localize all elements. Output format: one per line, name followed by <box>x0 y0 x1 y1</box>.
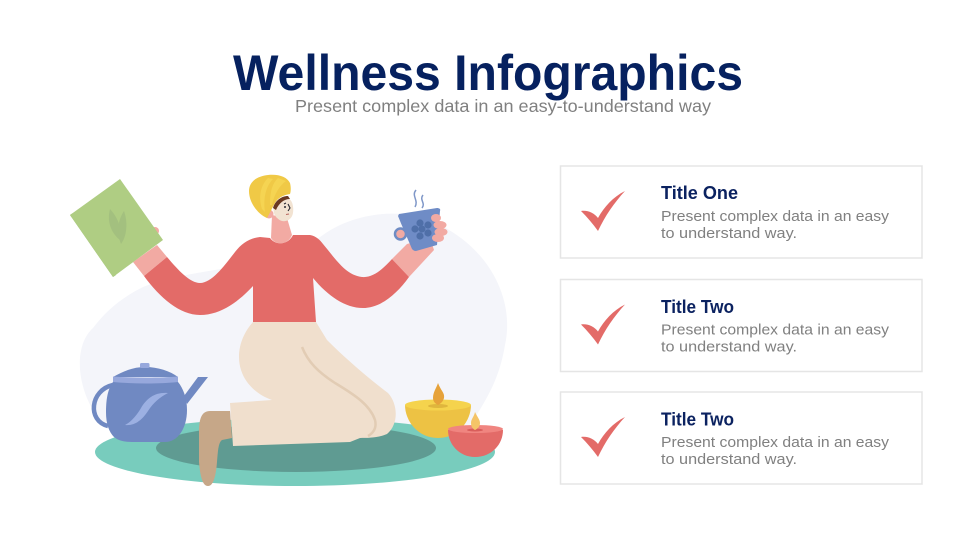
text: description: to understand way. <box>661 451 797 468</box>
illustration: wellness scene <box>70 175 507 486</box>
text: description: Present complex data in an easy <box>661 434 890 451</box>
text: description: to understand way. <box>661 338 797 356</box>
red candle <box>448 412 503 457</box>
turban <box>249 175 291 218</box>
icon: check mark <box>581 417 625 457</box>
icon: teapot <box>94 363 208 442</box>
heading: Title Two: Title Two <box>661 410 734 430</box>
text: description: to understand way. <box>661 225 797 242</box>
right hand <box>392 229 434 277</box>
neck <box>271 215 292 243</box>
panel: card one <box>560 166 922 258</box>
icon: check mark <box>581 191 625 231</box>
icon: book <box>70 179 163 277</box>
mat <box>95 418 495 486</box>
left hand <box>133 227 167 276</box>
head <box>249 175 293 221</box>
subtitle: Present complex data in an easy-to-understand way <box>295 96 711 116</box>
heading: Title Two: Title Two <box>661 297 734 317</box>
text: description: Present complex data in an easy <box>661 208 890 225</box>
foot <box>199 411 232 486</box>
title: Wellness Infographics <box>233 45 743 101</box>
icon: mug <box>395 190 448 251</box>
fingers <box>431 214 448 242</box>
mat shadow <box>156 424 436 472</box>
text: description: Present complex data in an easy <box>661 322 890 338</box>
sweater <box>144 235 409 322</box>
yellow candle <box>405 383 471 438</box>
panel: card three <box>560 392 922 484</box>
heading: Title One: Title One <box>661 183 738 203</box>
steam <box>414 190 423 208</box>
background blob <box>80 214 507 430</box>
icon: check mark <box>581 304 625 344</box>
panel: card two <box>560 280 922 372</box>
trousers <box>230 322 396 446</box>
